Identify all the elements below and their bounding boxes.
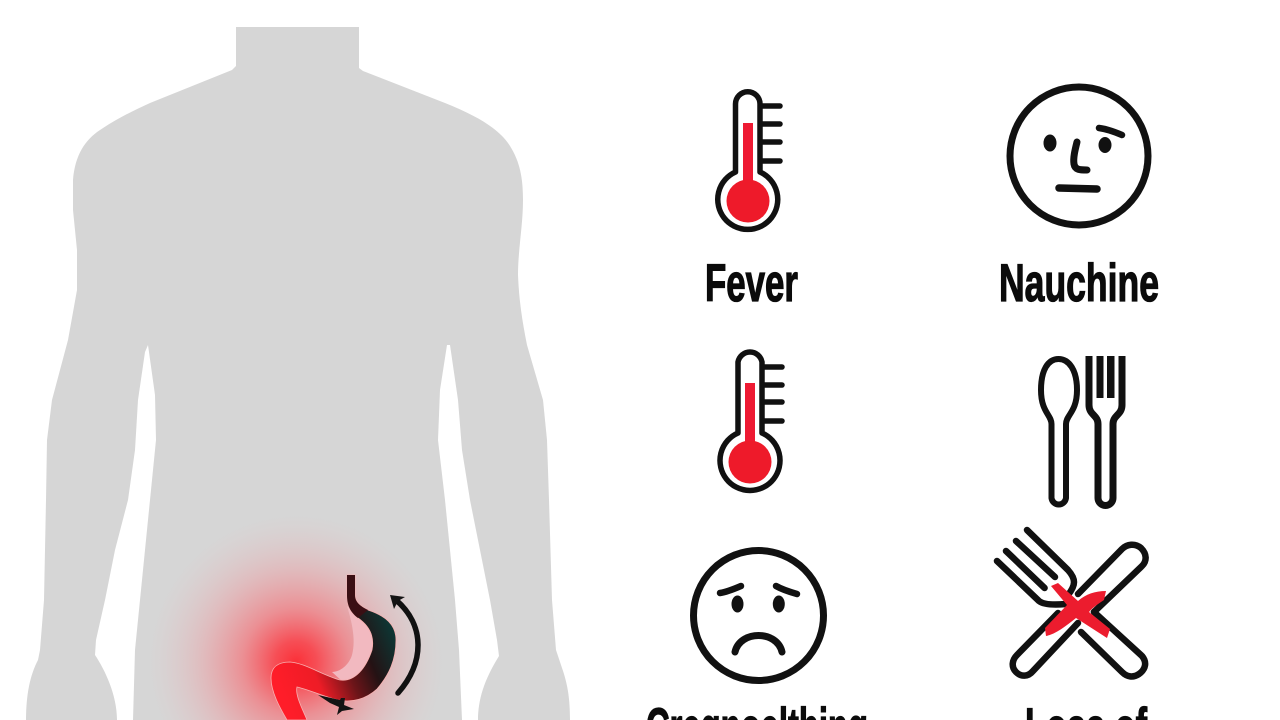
arrow: upward motion [390, 595, 418, 693]
symptom: loss of appetite [997, 530, 1147, 720]
stomach illustration [271, 575, 396, 720]
body silhouette [26, 27, 570, 720]
icon: spoon and fork [1041, 356, 1122, 506]
symptom: sadness [646, 550, 868, 720]
icon: thermometer second row [720, 352, 782, 490]
icon: sad face [694, 550, 824, 680]
icon: neutral face [1010, 87, 1148, 225]
icon: thermometer [718, 92, 780, 229]
symptom: nausea [999, 87, 1159, 313]
stomach spasm mark [318, 695, 354, 715]
label: Nauchine: Nauchine [999, 254, 1159, 313]
label: Fever: Fever [705, 254, 798, 313]
abdominal pain glow [174, 540, 418, 720]
icon: crossed fork and knife [997, 530, 1146, 676]
symptom: fever [705, 92, 798, 313]
